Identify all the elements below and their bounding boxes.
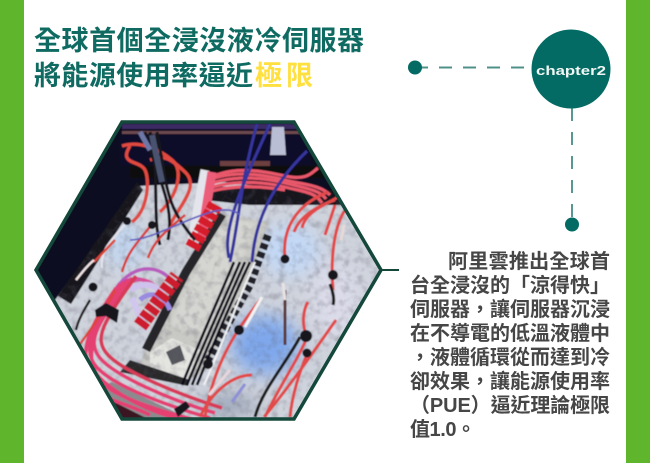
hexagon frame (36, 122, 381, 419)
black cable band (182, 262, 255, 385)
black cable group top (140, 132, 195, 245)
blue glow (103, 221, 359, 415)
red connector column upper (192, 170, 216, 248)
body text: 值1.0。 (410, 418, 476, 441)
floor grain (50, 180, 385, 422)
title (34, 26, 364, 91)
chapter badge: chapter2 (536, 63, 606, 78)
left floor wires (70, 215, 185, 355)
dark component strip (146, 214, 222, 350)
left green bar (0, 0, 24, 463)
title: 將能源使用率逼近 (34, 61, 253, 91)
title: 全球首個全浸沒液冷伺服器 (34, 26, 364, 56)
body text: 伺服器，讓伺服器沉浸 (410, 297, 610, 321)
body text: 阿里雲推出全球首 (448, 250, 610, 273)
blue wires (130, 124, 307, 262)
connector: hexagon to body text (381, 269, 399, 271)
top left red loop (122, 144, 190, 225)
title: 極限 (255, 61, 313, 91)
black edge left of floor (58, 182, 143, 304)
connector: dot to chapter badge (408, 60, 533, 74)
coolant floor (55, 182, 381, 419)
main horizontal red bundle (200, 168, 330, 203)
body text (410, 250, 610, 441)
body text: 卻效果，讓能源使用率 (410, 369, 610, 393)
cable ties (88, 217, 338, 417)
RJ connector (270, 127, 286, 155)
chapter badge (532, 30, 610, 108)
right floor red wires (200, 192, 345, 417)
connector: chapter badge to body text dot (565, 108, 579, 232)
body text: 台全浸沒的「涼得快」 (410, 273, 610, 297)
server board (120, 214, 268, 386)
body text: ，液體循環從而達到冷 (410, 346, 610, 369)
dark band behind the bundle (200, 186, 345, 205)
body text: （PUE）逼近理論極限 (410, 394, 610, 417)
black grey tray (106, 382, 176, 418)
lower left coil with red connectors (108, 269, 177, 330)
top rails (120, 124, 330, 178)
body text: 在不導電的低溫液體中 (410, 322, 610, 345)
pink bundle (85, 276, 222, 421)
hexagon photo: immersion-cooled server (30, 118, 390, 425)
right green bar (626, 0, 650, 463)
